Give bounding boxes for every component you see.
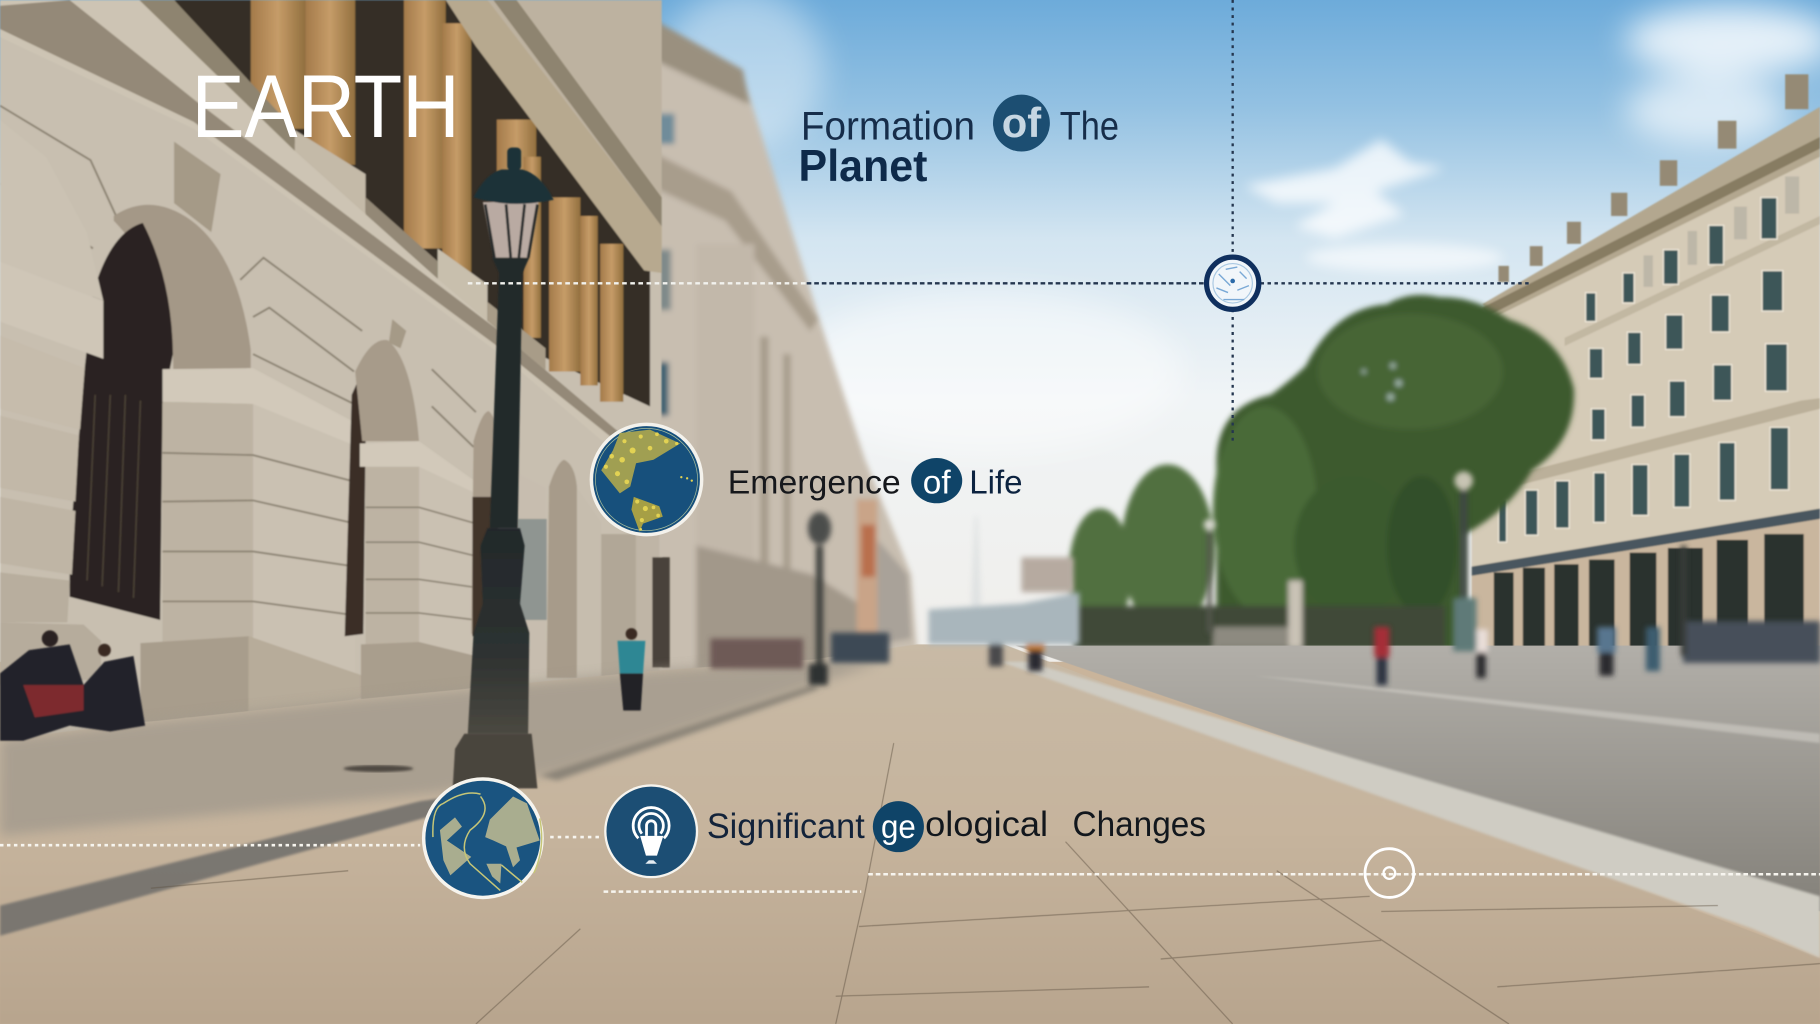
window bbox=[518, 519, 547, 620]
heading: Formation of The Planet: Planet bbox=[799, 142, 928, 191]
arch 1 bbox=[114, 205, 251, 404]
main cornice bbox=[0, 0, 657, 488]
title: EARTH: EARTH bbox=[192, 56, 460, 156]
distant pedestrians and street lamps bbox=[710, 471, 1820, 685]
keystone bbox=[174, 142, 221, 232]
far left building bbox=[644, 17, 917, 685]
badge: of: of bbox=[1002, 99, 1041, 146]
heading: Emergence of Life: Emergence bbox=[728, 464, 901, 501]
arch 2 bbox=[345, 372, 366, 636]
dashed guide: horizontal top bbox=[468, 282, 1529, 284]
ground bays bbox=[1494, 534, 1804, 650]
globe: continents bbox=[424, 779, 542, 897]
heading: Significant geological Changes: Changes bbox=[1072, 805, 1206, 844]
windows bbox=[1498, 197, 1789, 542]
heading: Significant geological Changes: ological bbox=[925, 805, 1048, 844]
badge: ge bbox=[873, 801, 924, 852]
paving joints bbox=[151, 743, 1820, 1024]
blind panels bbox=[1644, 176, 1799, 287]
marker: formation seal icon bbox=[1207, 257, 1259, 309]
right building bbox=[1472, 74, 1820, 662]
pier 2 bbox=[366, 464, 419, 685]
sky bbox=[0, 0, 1820, 662]
road bbox=[1016, 646, 1820, 911]
upper entablature bbox=[446, 0, 662, 273]
arch 4 bbox=[547, 460, 577, 678]
pavement shadow stripe bbox=[0, 796, 464, 936]
badge: of: of bbox=[923, 464, 951, 501]
badge: of bbox=[993, 95, 1050, 152]
arch 3 bbox=[471, 411, 499, 634]
pavement bbox=[0, 644, 1820, 1024]
balustrade bbox=[133, 0, 295, 163]
tree group bbox=[1069, 295, 1574, 650]
globe: emergence of life bbox=[591, 424, 702, 535]
pedestrians bbox=[0, 628, 645, 741]
white curb bbox=[1001, 662, 1820, 958]
bands bbox=[1565, 216, 1820, 346]
left blocks bbox=[0, 120, 103, 301]
dotted guide: vertical top bbox=[1232, 0, 1234, 444]
rusticated lines bbox=[0, 106, 476, 447]
badge: of bbox=[911, 458, 962, 503]
heading: Formation of The Planet bbox=[799, 95, 1119, 191]
heading: Formation of The Planet: The bbox=[1060, 104, 1119, 148]
heading: Formation of The Planet: Formation bbox=[801, 104, 975, 148]
dotted guides: bottom bbox=[0, 837, 1820, 892]
near left building bbox=[0, 0, 670, 749]
pier 1 bbox=[162, 402, 253, 650]
upper facade stone bbox=[488, 0, 662, 250]
main street lamp post bbox=[453, 147, 554, 788]
heading: Emergence of Life bbox=[728, 458, 1023, 503]
colonnade back wall bbox=[174, 0, 650, 406]
marker: white ring target bbox=[1365, 849, 1414, 897]
heading: Emergence of Life: Life bbox=[969, 464, 1023, 501]
badge: ge: ge bbox=[881, 809, 916, 846]
clouds bbox=[662, 0, 1820, 453]
heading: Significant geological Changes bbox=[707, 801, 1206, 852]
heading: Significant geological Changes: Significant bbox=[707, 807, 865, 846]
icon: lightbulb badge bbox=[605, 785, 697, 877]
